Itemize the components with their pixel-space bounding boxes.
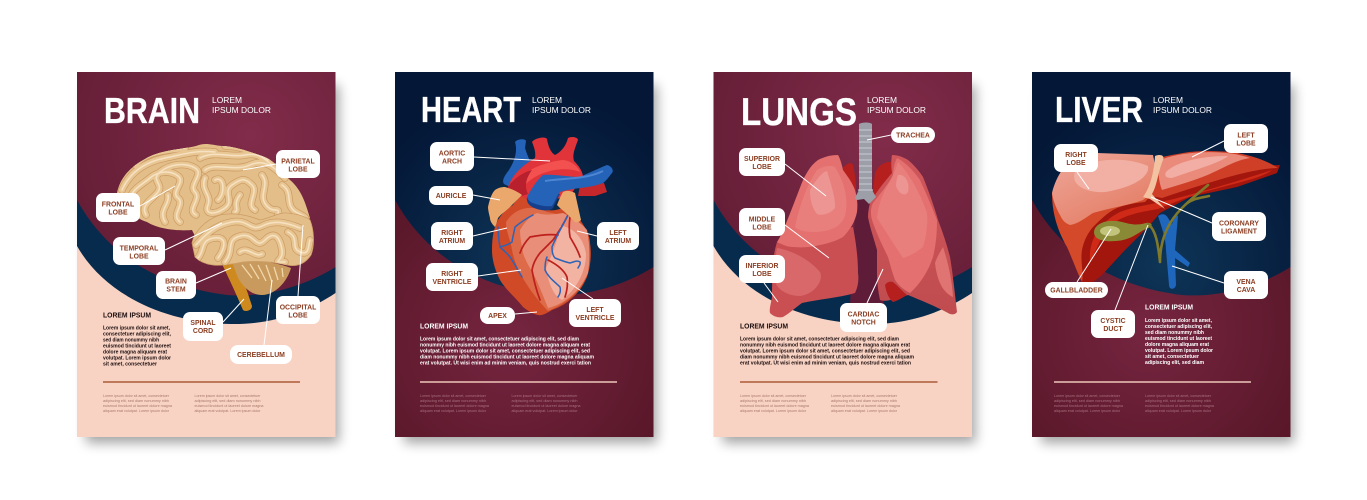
illustration: heart [488, 137, 613, 315]
pulmonary artery [527, 165, 613, 206]
label: aortic arch [430, 142, 550, 171]
label: auricle [429, 186, 500, 205]
footer text column 1: aliquam erat volutpat. Lorem ipsum dolor [420, 409, 487, 413]
subtitle: LOREM [1153, 96, 1183, 105]
label: trachea: TRACHEA [896, 132, 930, 140]
text block body [1145, 318, 1213, 366]
right lobe highlight [1074, 160, 1148, 192]
label: gallbladder [1045, 229, 1111, 298]
label: occipital lobe [276, 225, 320, 324]
text block body: diam nonummy nibh euismod tincidunt ut laoreet dolore magna aliquam [740, 354, 915, 360]
poster shadow [86, 85, 339, 443]
label: apex: APEX [488, 313, 507, 320]
label: right lobe: RIGHT [1065, 152, 1088, 159]
panel: liver poster [1032, 72, 1294, 443]
label: left ventricle: VENTRICLE [575, 315, 615, 322]
footer text column 1: Lorem ipsum dolor sit amet, consectetuer [420, 394, 487, 398]
footer text column 1: adipiscing elit, sed diam nonummy nibh [420, 399, 486, 403]
text block body: euismod tincidunt ut laoreet [1145, 336, 1212, 342]
label: inferior lobe: INFERIOR [746, 263, 778, 270]
ventricle highlight [546, 226, 586, 300]
subtitle [1153, 96, 1212, 115]
label: spinal cord: SPINAL [190, 320, 216, 327]
heart body [492, 197, 591, 315]
subtitle [212, 96, 271, 115]
right lung highlight [896, 175, 909, 194]
text block body: Lorem ipsum dolor sit amet, [1145, 318, 1213, 324]
label: right ventricle [426, 263, 521, 291]
footer text column 1: adipiscing elit, sed diam nonummy nibh [740, 399, 806, 403]
text block body: volutpat. Lorem ipsum dolor sit amet, consectetuer adipiscing elit, sed [420, 348, 590, 354]
label: temporal lobe: LOBE [129, 254, 149, 260]
left lobe highlight [1165, 156, 1228, 178]
label: coronary ligament [1151, 197, 1266, 241]
temporal lobe folds [196, 222, 310, 262]
label: frontal lobe: FRONTAL [102, 202, 134, 208]
peach lower area [714, 246, 972, 437]
title: BRAIN [104, 90, 200, 131]
footer text column 2 [194, 394, 264, 413]
subtitle: IPSUM DOLOR [532, 106, 591, 115]
descending red vessel [578, 183, 607, 196]
label: parietal lobe: PARIETAL [281, 158, 315, 166]
left lung lower body [770, 227, 858, 317]
left hollow [843, 163, 856, 192]
pulmonary artery shade [527, 188, 560, 210]
mediastinum [850, 196, 884, 305]
text block body: adipiscing elit, sed diam [1145, 360, 1205, 366]
label: temporal lobe: TEMPORAL [120, 246, 158, 252]
subtitle [532, 96, 591, 115]
subtitle: IPSUM DOLOR [212, 106, 271, 115]
panel: lungs poster [714, 72, 976, 443]
aorta highlight [518, 160, 580, 185]
title: LUNGS [741, 91, 857, 134]
footer text column 2: Lorem ipsum dolor sit amet, consectetuer [194, 394, 261, 398]
text block heading: LOREM IPSUM [740, 322, 788, 330]
label: temporal lobe [113, 223, 222, 265]
label: middle lobe: MIDDLE [749, 216, 776, 224]
footer text column 2: Lorem ipsum dolor sit amet, consectetuer [1145, 394, 1212, 398]
footer text column 2 [1145, 394, 1214, 413]
right lobe pink [1052, 153, 1155, 225]
text block body [103, 326, 172, 368]
footer text column 1: euismod tincidunt ut laoreet dolore magna [103, 404, 172, 408]
label: right atrium: RIGHT [441, 230, 464, 237]
label: inferior lobe [739, 255, 785, 302]
footer text column 2: aliquam erat volutpat. Lorem ipsum dolor [512, 409, 578, 413]
label: frontal lobe [96, 186, 175, 222]
label: occipital lobe: OCCIPITAL [280, 304, 316, 312]
text block heading: LOREM IPSUM [103, 310, 151, 320]
liver red mid band [1090, 170, 1272, 262]
panel: brain poster [77, 72, 339, 443]
footer text column 2: adipiscing elit, sed diam nonummy nibh [831, 399, 897, 403]
left lung inferior lobe [775, 248, 821, 296]
label: middle lobe: LOBE [752, 224, 772, 232]
text block body: Lorem ipsum dolor sit amet, consectetuer adipiscing elit, sed diam [420, 336, 580, 342]
label: inferior lobe: LOBE [752, 271, 772, 278]
cerebrum folds [122, 146, 308, 225]
bile duct [1148, 185, 1209, 262]
right lung red notch [885, 282, 907, 302]
label: cerebellum: CEREBELLUM [237, 352, 285, 359]
footer text column 1: aliquam erat volutpat. Lorem ipsum dolor [103, 409, 170, 413]
text block body: Lorem ipsum dolor sit amet, [103, 326, 171, 332]
left lung highlight [810, 171, 835, 215]
footer text column 1: adipiscing elit, sed diam nonummy nibh [103, 399, 169, 403]
text block body: nonummy nibh euismod tincidunt ut laoreet dolore magna aliquam erat [420, 342, 590, 348]
right lung side lobe [935, 247, 953, 297]
text block body: volutpat. Lorem ipsum dolor [103, 356, 171, 362]
label: vena cava: VENA [1236, 279, 1256, 286]
label: spinal cord [183, 299, 244, 341]
liver dark underside [1070, 165, 1280, 282]
subtitle: LOREM [867, 96, 897, 105]
left lobe pink [1159, 152, 1250, 190]
label: frontal lobe: LOBE [108, 210, 128, 216]
label: left lobe: LOBE [1236, 140, 1256, 148]
text block body: consectetuer adipiscing elit, [103, 332, 172, 338]
text block body: dolore magna aliquam erat [103, 350, 167, 356]
subtitle: LOREM [212, 96, 242, 105]
text block body: dolore magna aliquam erat [1145, 342, 1209, 348]
right hollow [872, 162, 896, 200]
text block body [420, 336, 595, 366]
label: right atrium: ATRIUM [439, 238, 465, 245]
title: HEART [421, 89, 521, 130]
coronary ligament [1143, 155, 1165, 209]
label: aortic arch: AORTIC [439, 150, 465, 158]
label: brain stem: BRAIN [165, 278, 187, 286]
footer text column 1 [103, 394, 172, 413]
footer text column 1: Lorem ipsum dolor sit amet, consectetuer [1054, 394, 1121, 398]
cerebrum base [117, 144, 310, 236]
label: cerebellum [230, 280, 292, 364]
label: left atrium [577, 222, 639, 250]
maroon lower area [1032, 200, 1290, 437]
footer text column 2: Lorem ipsum dolor sit amet, consectetuer [831, 394, 898, 398]
label: cardiac notch: NOTCH [851, 320, 876, 326]
footer text column 2: Lorem ipsum dolor sit amet, consectetuer [512, 394, 578, 398]
left lobe red base [1152, 151, 1278, 198]
right lung [868, 155, 957, 314]
maroon lower area [395, 200, 654, 437]
footer text column 1: adipiscing elit, sed diam nonummy nibh [1054, 399, 1120, 403]
footer text column 2: euismod tincidunt ut laoreet dolore magna [831, 404, 900, 408]
footer text column 2: aliquam erat volutpat. Lorem ipsum dolor [1145, 409, 1212, 413]
footer text column 2: adipiscing elit, sed diam nonummy nibh [194, 399, 261, 403]
poster shadow [404, 85, 657, 443]
footer text column 1: euismod tincidunt ut laoreet dolore magna [1054, 404, 1123, 408]
label: superior lobe: SUPERIOR [744, 156, 780, 163]
label: cystic duct [1091, 225, 1148, 338]
footer text column 1: euismod tincidunt ut laoreet dolore magna [740, 404, 809, 408]
subtitle: IPSUM DOLOR [1153, 106, 1212, 115]
text block body: nonummy nibh euismod tincidunt ut laoreet dolore magna aliquam erat [740, 342, 910, 348]
orange-red outer band [1052, 170, 1153, 282]
trachea [855, 122, 876, 204]
label: cystic duct: CYSTIC [1100, 318, 1126, 325]
illustration: lungs [770, 122, 957, 317]
label: brain stem [156, 268, 231, 299]
coronary vessels [520, 215, 580, 300]
footer text column 2: euismod tincidunt ut laoreet dolore magna [1145, 404, 1214, 408]
label: right ventricle: RIGHT [441, 271, 464, 278]
text block body: sit amet, consectetuer [103, 362, 157, 368]
label: right lobe [1054, 144, 1098, 189]
footer text column 2: aliquam erat volutpat. Lorem ipsum dolor [194, 409, 261, 413]
label: left lobe: LEFT [1237, 132, 1255, 140]
title: LIVER [1055, 89, 1143, 130]
footer text column 1 [420, 394, 489, 413]
poster background [77, 72, 336, 437]
label: cystic duct: DUCT [1103, 326, 1123, 333]
left lung light patch [795, 166, 846, 232]
text block body: euismod tincidunt ut laoreet [103, 344, 171, 350]
illustration: brain [117, 144, 314, 311]
upper mid-tone [506, 208, 588, 311]
label: left atrium: ATRIUM [605, 238, 631, 245]
label: occipital lobe: LOBE [288, 312, 308, 320]
peach lower area [77, 246, 336, 437]
footer text column 2: euismod tincidunt ut laoreet dolore magna [512, 404, 581, 408]
label: superior lobe: LOBE [752, 164, 772, 171]
navy wave band [77, 200, 336, 437]
footer text column 2: adipiscing elit, sed diam nonummy nibh [512, 399, 578, 403]
text block body: diam nonummy nibh euismod tincidunt ut laoreet dolore magna aliquam [420, 354, 595, 360]
text block body: volutpat. Lorem ipsum dolor sit amet, consectetuer adipiscing elit, sed [740, 348, 910, 354]
text block heading: LOREM IPSUM [420, 322, 468, 330]
footer text column 1: Lorem ipsum dolor sit amet, consectetuer [740, 394, 807, 398]
label: auricle: AURICLE [436, 193, 467, 200]
label: left lobe [1192, 124, 1268, 157]
label: superior lobe [739, 148, 826, 196]
subtitle [867, 96, 926, 115]
poster background [714, 72, 972, 437]
poster shadow [1041, 85, 1294, 443]
footer text column 1 [1054, 394, 1123, 413]
footer text column 1: euismod tincidunt ut laoreet dolore magna [420, 404, 489, 408]
panel: heart poster [395, 72, 657, 443]
footer text column 2: aliquam erat volutpat. Lorem ipsum dolor [831, 409, 898, 413]
poster background [395, 72, 654, 437]
label: right lobe: LOBE [1066, 160, 1086, 167]
label: right atrium [431, 222, 507, 250]
label: aortic arch: ARCH [442, 158, 462, 166]
label: spinal cord: CORD [193, 328, 213, 335]
text block body: volutpat. Lorem ipsum dolor [1145, 348, 1213, 354]
pulmonary highlight [545, 171, 603, 181]
brain stem [222, 259, 252, 311]
text block body: sed diam nonummy nibh [1145, 330, 1204, 336]
text block body: erat volutpat. Ut wisi enim ad minim veniam, quis nostrud exerci tation [420, 360, 591, 366]
label: trachea [867, 127, 935, 143]
footer text column 1: aliquam erat volutpat. Lorem ipsum dolor [1054, 409, 1121, 413]
label: cardiac notch: CARDIAC [848, 312, 879, 318]
label: coronary ligament: LIGAMENT [1221, 228, 1258, 236]
poster background [1032, 72, 1290, 437]
label: cardiac notch [840, 269, 887, 332]
right auricle [488, 187, 522, 227]
label: right ventricle: VENTRICLE [432, 279, 472, 286]
text block body [740, 336, 915, 366]
text block body: Lorem ipsum dolor sit amet, consectetuer adipiscing elit, sed diam [740, 336, 900, 342]
label: left ventricle [562, 278, 621, 327]
text block body: consectetuer adipiscing elit, [1145, 324, 1213, 330]
label: middle lobe [739, 208, 829, 258]
footer text column 2 [512, 394, 581, 413]
footer text column 1 [740, 394, 809, 413]
label: parietal lobe: LOBE [288, 166, 308, 174]
left auricle [557, 191, 581, 222]
left lung upper lobe [777, 155, 857, 247]
label: coronary ligament: CORONARY [1219, 220, 1259, 228]
aorta [508, 137, 583, 205]
label: brain stem: STEM [166, 286, 186, 294]
footer text column 1: Lorem ipsum dolor sit amet, consectetuer [103, 394, 170, 398]
illustration: liver [1052, 151, 1280, 289]
label: vena cava: CAVA [1237, 287, 1255, 294]
temporal lobe base [192, 213, 314, 266]
footer text column 2 [831, 394, 900, 413]
text block body: sit amet, consectetuer [1145, 354, 1199, 360]
gallbladder [1094, 221, 1152, 241]
footer text column 1: aliquam erat volutpat. Lorem ipsum dolor [740, 409, 807, 413]
footer text column 2: euismod tincidunt ut laoreet dolore magna [194, 404, 264, 408]
label: vena cava [1172, 266, 1268, 299]
lighter ventricle [520, 213, 589, 308]
subtitle: LOREM [532, 96, 562, 105]
text block heading: LOREM IPSUM [1145, 302, 1193, 312]
label: apex [480, 307, 537, 324]
superior vena cava [503, 139, 532, 190]
cerebellum [232, 260, 291, 295]
text block body: erat volutpat. Ut wisi enim ad minim veniam, quis nostrud exerci tation [740, 360, 911, 366]
label: left atrium: LEFT [609, 230, 627, 237]
label: parietal lobe [243, 150, 320, 178]
aorta shade [508, 170, 532, 196]
navy wave band [714, 200, 972, 437]
right lung upper lobe [871, 158, 937, 293]
vena cava [1158, 214, 1190, 289]
poster shadow [722, 85, 976, 443]
footer text column 2: adipiscing elit, sed diam nonummy nibh [1145, 399, 1211, 403]
label: gallbladder: GALLBLADDER [1050, 288, 1103, 294]
text block body: sed diam nonummy nibh [103, 338, 159, 344]
right lung light patch [877, 162, 927, 258]
label: left ventricle: LEFT [586, 307, 604, 314]
subtitle: IPSUM DOLOR [867, 106, 926, 115]
